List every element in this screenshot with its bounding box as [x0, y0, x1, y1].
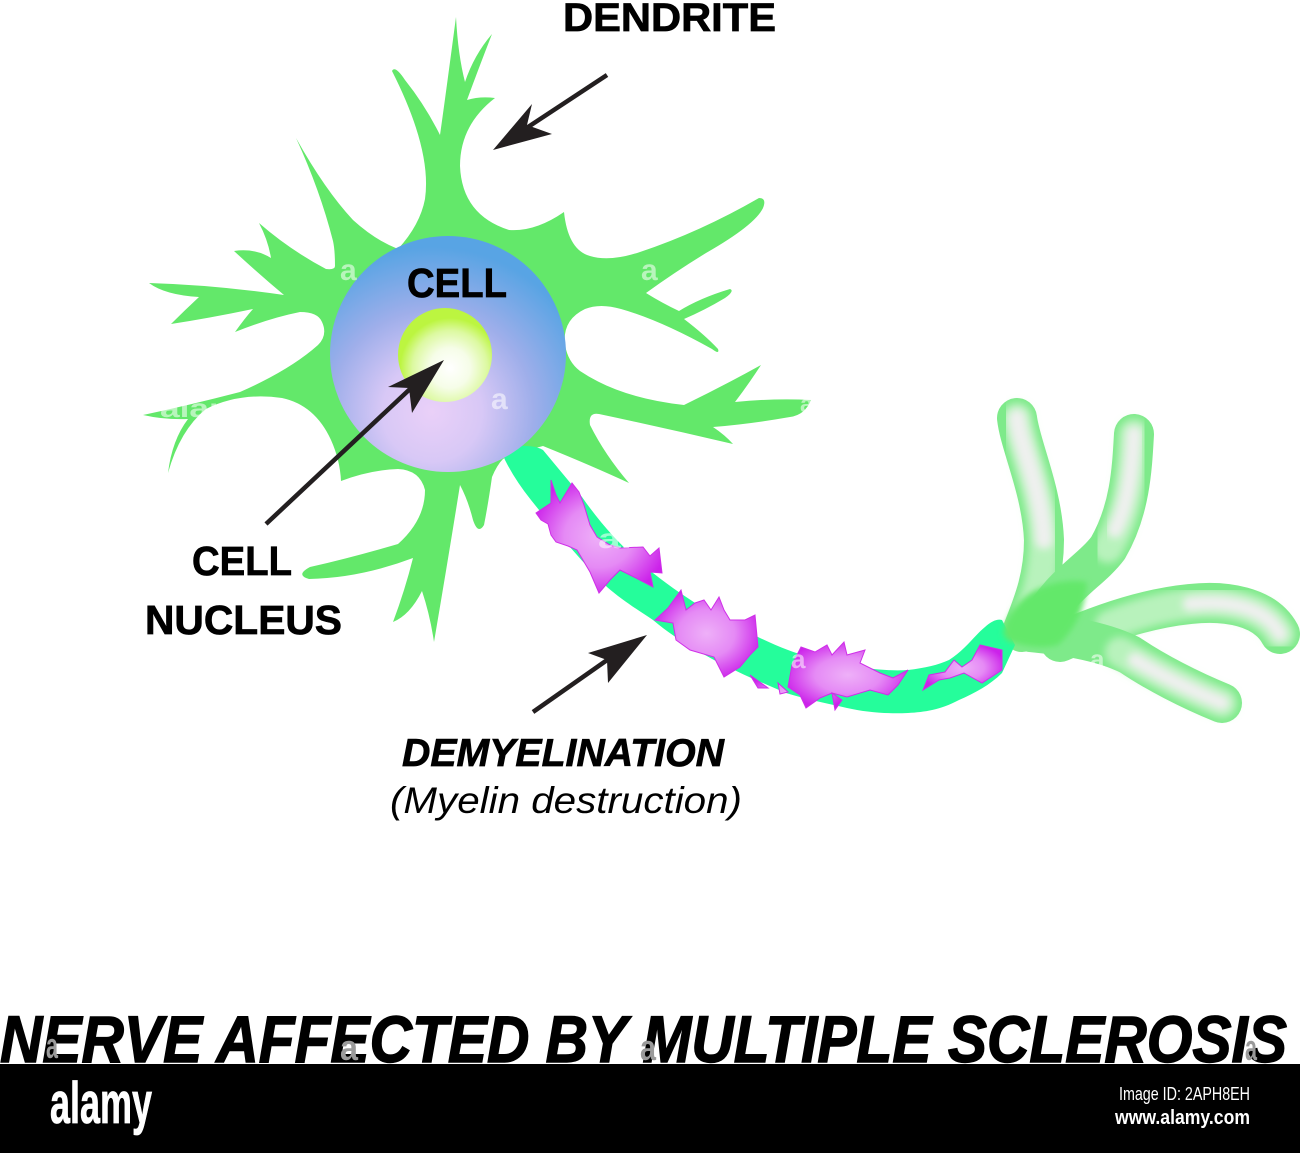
website: www.alamy.com — [1114, 1107, 1250, 1129]
patch 4 — [923, 645, 1002, 690]
label: cell: CELL — [407, 260, 507, 306]
footer logo: alamy — [50, 1071, 152, 1136]
title watermarks: a — [1245, 1027, 1258, 1068]
watermarks: a — [340, 254, 357, 287]
axon terminal hub — [1003, 581, 1087, 647]
watermarks: a — [1090, 644, 1105, 674]
label: cell nucleus — [145, 538, 342, 643]
patch 3 — [788, 642, 908, 708]
branch: lower right — [1030, 632, 1222, 703]
patch 2 — [655, 590, 758, 677]
patch 3 fragments — [750, 675, 842, 710]
title watermarks — [46, 1025, 1258, 1068]
branch: right — [1060, 603, 1280, 642]
axon terminal branches — [1017, 418, 1280, 703]
label: cell nucleus: CELL — [192, 538, 292, 584]
image id: Image ID: 2APH8EH — [1119, 1084, 1250, 1104]
branch: upper right — [1040, 434, 1134, 625]
watermarks — [160, 254, 1105, 674]
label: myelin destruction: (Myelin destruction) — [390, 780, 742, 821]
label: cell nucleus: NUCLEUS — [145, 597, 342, 643]
axon — [504, 446, 1015, 713]
neuron cell body with dendrites — [143, 17, 811, 642]
cell nucleus circle — [398, 308, 492, 402]
arrow: dendrite — [493, 75, 607, 150]
title watermarks: a — [640, 1027, 657, 1068]
watermarks: al — [598, 523, 632, 554]
cell body circle — [330, 236, 566, 472]
arrow: cell nucleus — [266, 360, 444, 524]
damaged myelin patches — [536, 480, 1002, 710]
branch: upper left — [1017, 418, 1044, 632]
patch 1 — [536, 480, 662, 593]
watermarks: alamy — [160, 393, 261, 423]
label: demyelination: DEMYELINATION — [402, 732, 725, 775]
title watermarks: a — [340, 1027, 359, 1068]
watermarks: a — [800, 391, 814, 418]
footer band — [0, 1064, 1300, 1153]
watermarks: a — [791, 644, 806, 674]
watermarks: a — [491, 383, 508, 416]
title watermarks: a — [46, 1025, 59, 1066]
arrow: demyelination — [533, 635, 647, 712]
watermarks: a — [641, 254, 658, 287]
